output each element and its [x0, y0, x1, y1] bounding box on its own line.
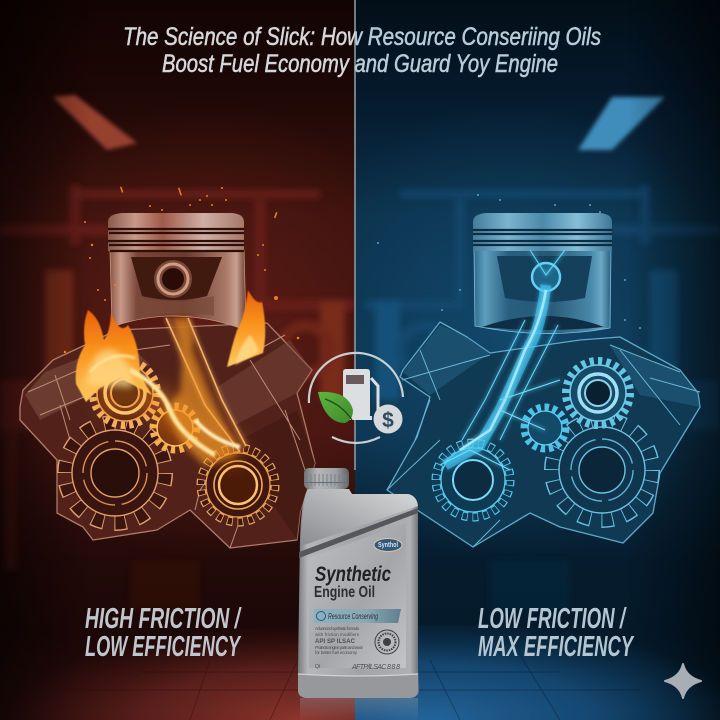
icon: fuel pump	[342, 369, 381, 420]
left label: LOW EFFICIENCY	[85, 631, 242, 663]
engine block: left	[20, 323, 315, 548]
title: The Science of Slick: How Resource Conseriing Oils	[123, 23, 601, 51]
piston: left	[108, 213, 246, 328]
panel: right blue background	[355, 0, 720, 720]
engine block: right	[387, 322, 700, 547]
divider line	[354, 0, 356, 470]
product: oil bottle	[298, 468, 419, 720]
label fine print: for better fuel economy	[315, 650, 358, 655]
icon: fuel economy badge	[309, 353, 403, 443]
bottle shoulder	[301, 489, 418, 546]
gear: small centre	[153, 406, 197, 450]
label fine print: API SP ILSAC	[315, 639, 356, 645]
piston: right	[473, 213, 612, 334]
bottle label	[309, 523, 406, 671]
illustration: hot engine with flames	[20, 187, 315, 548]
gear: lower left glowing	[436, 443, 510, 517]
illustration: cool engine with blue lubricant	[377, 194, 700, 547]
right label: MAX EFFICIENCY	[478, 631, 635, 663]
label logo: Synthol	[378, 542, 398, 549]
left label	[85, 603, 242, 663]
label fine print	[315, 626, 364, 670]
gear: large right	[552, 420, 652, 520]
label fine print: Protects engine parts and wear	[315, 645, 364, 650]
right label: LOW FRICTION /	[478, 603, 627, 635]
lubricant stream	[440, 250, 565, 470]
label subheading: Engine Oil	[314, 584, 375, 601]
gear: large left	[65, 423, 165, 523]
gear: small centre glowing	[524, 407, 566, 449]
right label	[478, 603, 635, 663]
label band	[314, 609, 401, 623]
icon: ring	[309, 353, 403, 443]
panel: left red background	[0, 0, 355, 720]
bottle body	[298, 489, 419, 698]
left label: HIGH FRICTION /	[85, 603, 242, 635]
label fine print: with friction modifiers	[315, 632, 360, 637]
label logo	[374, 538, 402, 552]
label fine print: Advanced synthetic formula	[315, 626, 359, 631]
icon: sparkle watermark	[665, 664, 701, 698]
sparks	[64, 187, 299, 353]
label fine print: Qt	[315, 664, 321, 670]
icon: leaf	[318, 392, 353, 423]
gear: top left hot	[93, 361, 157, 425]
label band: Resource Conserving	[328, 612, 378, 621]
connecting rod: left	[166, 318, 246, 452]
title	[123, 23, 601, 78]
label code: AFTP/ILSAC 8 8 8	[351, 664, 400, 671]
bottle cap	[304, 468, 349, 489]
droplets	[377, 194, 641, 329]
gear: lower right hot	[201, 448, 275, 522]
gear: top right	[566, 361, 630, 425]
label heading: Synthetic	[315, 563, 391, 586]
label seal	[375, 630, 399, 654]
bottle base	[298, 674, 418, 698]
flames	[76, 290, 265, 466]
icon: dollar: $	[382, 409, 394, 432]
title: Boost Fuel Economy and Guard Yoy Engine	[162, 50, 558, 78]
